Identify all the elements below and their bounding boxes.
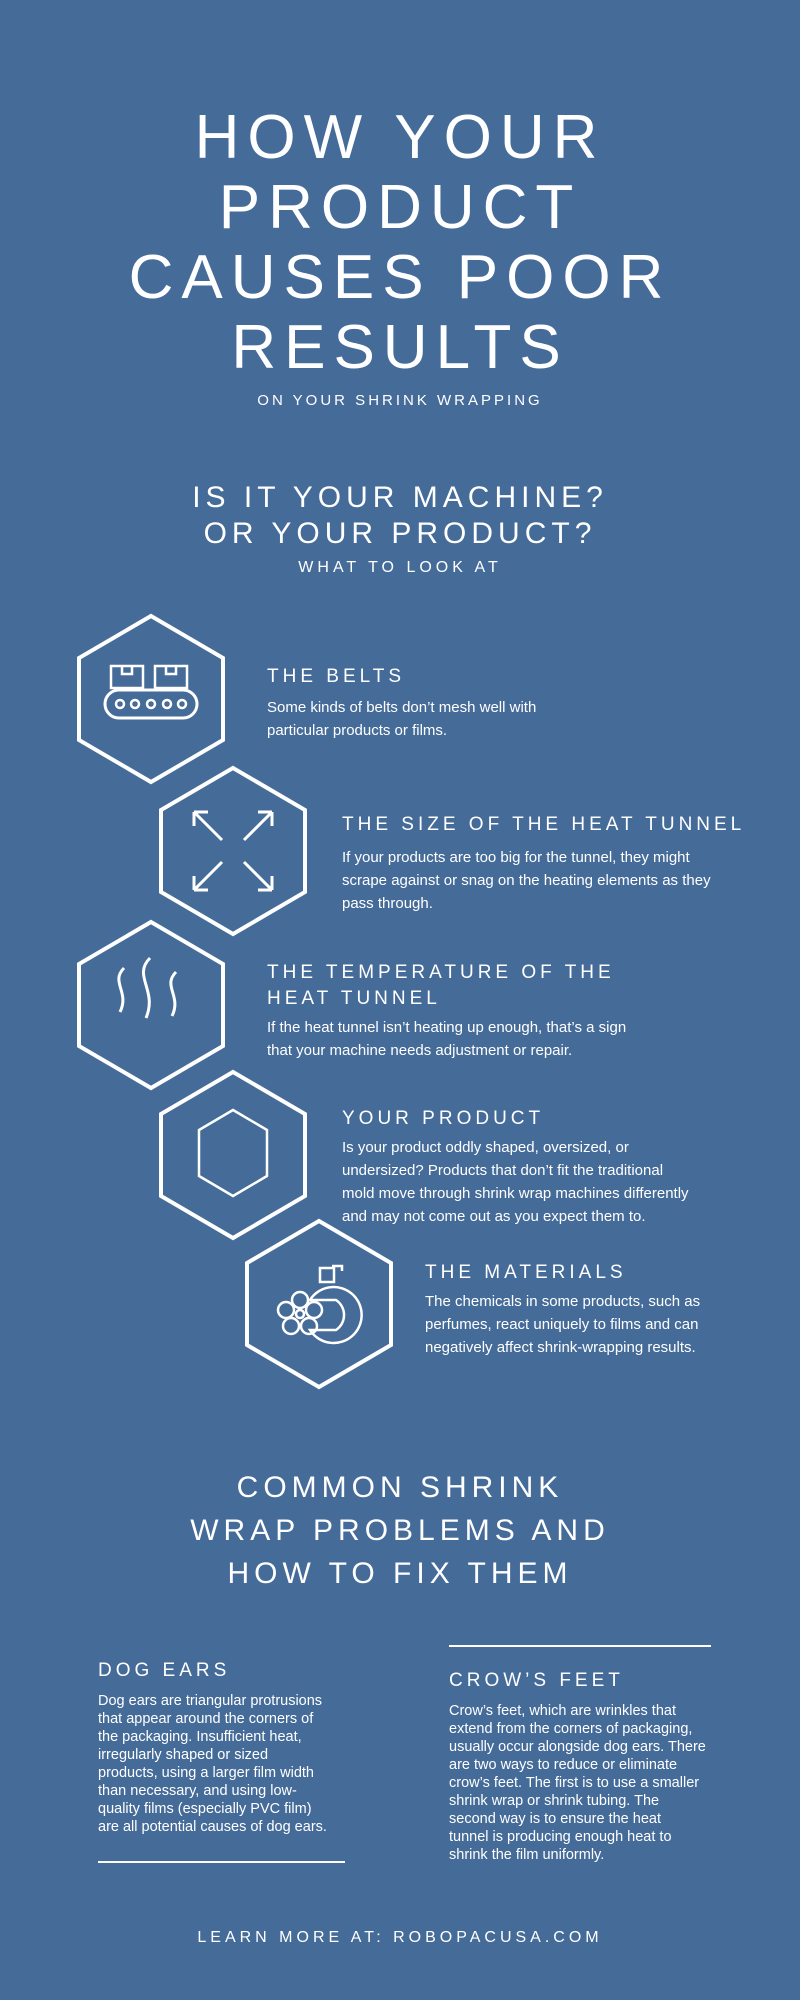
item: your product: Is your product oddly shaped, oversized, or: [342, 1139, 629, 1156]
panel: crow's feet: shrink the film uniformly.: [449, 1847, 604, 1863]
item: your product: and may not come out as you expect them to.: [342, 1208, 646, 1225]
title: PRODUCT: [219, 173, 581, 242]
icon: perfume: [247, 1221, 391, 1387]
title: CAUSES POOR: [129, 243, 671, 312]
panel: dog ears: irregularly shaped or sized: [98, 1747, 268, 1763]
panel: crow's feet: second way is to ensure the heat: [449, 1811, 661, 1827]
panel: dog ears: products, using a larger film width: [98, 1765, 314, 1781]
panel: dog ears: that appear around the corners of: [98, 1711, 313, 1727]
section heading: common problems: [190, 1471, 610, 1590]
panel: dog ears: [98, 1660, 327, 1835]
panel: dog ears: DOG EARS: [98, 1660, 230, 1681]
panel: dog ears: Dog ears are triangular protrusions: [98, 1693, 322, 1709]
section heading: machine or product: OR YOUR PRODUCT?: [204, 517, 596, 550]
item: temperature: HEAT TUNNEL: [267, 988, 441, 1009]
item: belts: [267, 666, 536, 739]
item: your product: mold move through shrink wrap machines differently: [342, 1185, 689, 1202]
item: size of heat tunnel: pass through.: [342, 895, 433, 912]
panel: crow's feet: Crow’s feet, which are wrinkles that: [449, 1703, 676, 1719]
panel: crow's feet: usually occur alongside dog ears. There: [449, 1739, 706, 1755]
icon: size arrows: [161, 768, 305, 934]
item: your product: undersized? Products that don’t fit the traditional: [342, 1162, 663, 1179]
item: materials: [425, 1262, 700, 1356]
item: temperature: THE TEMPERATURE OF THE: [267, 962, 615, 983]
item: belts: THE BELTS: [267, 666, 405, 687]
title: HOW YOUR: [195, 103, 605, 172]
panel: dog ears: quality films (especially PVC film): [98, 1801, 312, 1817]
hexagon icons: [77, 614, 393, 1390]
section heading: common problems: COMMON SHRINK: [237, 1471, 563, 1504]
item: temperature: that your machine needs adjustment or repair.: [267, 1042, 572, 1059]
item: materials: THE MATERIALS: [425, 1262, 627, 1283]
panel: crow's feet: crow’s feet. The first is to use a smaller: [449, 1775, 699, 1791]
item: size of heat tunnel: scrape against or snag on the heating elements as they: [342, 872, 711, 889]
subtitle: ON YOUR SHRINK WRAPPING: [257, 392, 543, 409]
item: your product: [342, 1108, 689, 1225]
item: size of heat tunnel: [342, 814, 745, 912]
item: materials: The chemicals in some products, such as: [425, 1293, 700, 1310]
panel: crow's feet: extend from the corners of packaging,: [449, 1721, 692, 1737]
icon: product hexagon: [161, 1072, 305, 1238]
footer: LEARN MORE AT: ROBOPACUSA.COM: [197, 1929, 603, 1946]
title: [129, 103, 671, 382]
panel: crow's feet: are two ways to reduce or eliminate: [449, 1757, 677, 1773]
icon: heat waves: [79, 922, 223, 1088]
panel: crow's feet: [449, 1670, 706, 1863]
sub heading: what to look at: WHAT TO LOOK AT: [298, 559, 502, 576]
section heading: common problems: WRAP PROBLEMS AND: [190, 1514, 610, 1547]
icon: belts: [79, 616, 223, 782]
item: belts: particular products or films.: [267, 722, 447, 739]
section heading: machine or product: IS IT YOUR MACHINE?: [192, 481, 608, 514]
item: materials: perfumes, react uniquely to films and can: [425, 1316, 698, 1333]
item: materials: negatively affect shrink-wrapping results.: [425, 1339, 696, 1356]
item: temperature: If the heat tunnel isn’t heating up enough, that’s a sign: [267, 1019, 626, 1036]
item: temperature: [267, 962, 626, 1059]
item: your product: YOUR PRODUCT: [342, 1108, 544, 1129]
panel: dog ears: the packaging. Insufficient heat,: [98, 1729, 302, 1745]
panel: dog ears: than necessary, and using low-: [98, 1783, 297, 1799]
item: belts: Some kinds of belts don’t mesh well with: [267, 699, 536, 716]
item: size of heat tunnel: THE SIZE OF THE HEAT TUNNEL: [342, 814, 745, 835]
panel: crow's feet: shrink wrap or shrink tubing. The: [449, 1793, 659, 1809]
section heading: common problems: HOW TO FIX THEM: [227, 1557, 572, 1590]
item: size of heat tunnel: If your products are too big for the tunnel, they might: [342, 849, 690, 866]
panel: crow's feet: tunnel is producing enough heat to: [449, 1829, 672, 1845]
panel: dog ears: are all potential causes of dog ears.: [98, 1819, 327, 1835]
section heading: machine or product: [192, 481, 608, 550]
panel: crow's feet: CROW’S FEET: [449, 1670, 624, 1691]
title: RESULTS: [231, 313, 569, 382]
